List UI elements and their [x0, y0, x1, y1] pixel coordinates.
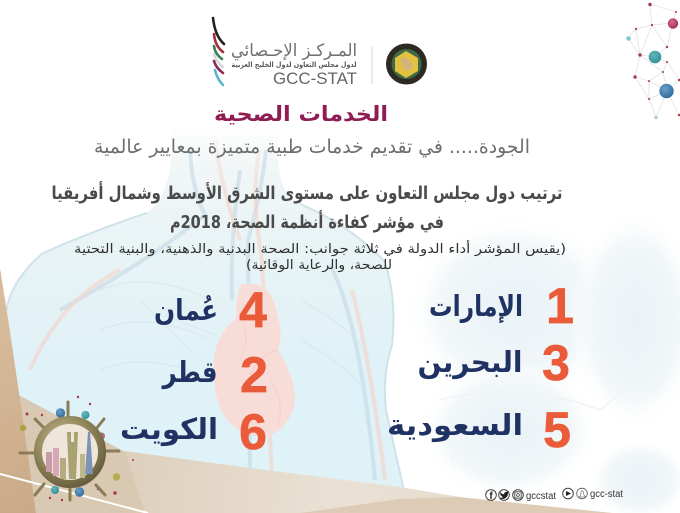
network decoration: top right [626, 3, 680, 119]
country name: قطر [161, 355, 218, 389]
country name: عُمان [154, 293, 218, 327]
title: الخدمات الصحية [214, 102, 388, 126]
heading line 1: ترتيب دول مجلس التعاون على مستوى الشرق الأوسط وشمال أفريقيا [52, 181, 562, 204]
decoration: tan left wedge [0, 385, 145, 513]
logo: ribbon [213, 18, 224, 85]
decoration: tan left strip [0, 268, 36, 513]
icon: ship wheel with city skyline [20, 396, 134, 501]
small teal node [626, 36, 631, 41]
heading line 2: في مؤشر كفاءة أنظمة الصحة، 2018م [170, 210, 444, 233]
rank number 6: 6 [239, 404, 267, 460]
social media footer [486, 488, 623, 502]
logo: GCC emblem [386, 44, 427, 84]
icon: snapchat [577, 488, 587, 499]
decoration: white diagonal line [0, 474, 148, 513]
rank number 5: 5 [543, 402, 571, 458]
ranking: Bahrain [418, 335, 570, 391]
country name: السعودية [387, 408, 523, 442]
rank number 3: 3 [542, 335, 570, 391]
ranking: Qatar [161, 347, 268, 403]
country name: الإمارات [429, 289, 523, 323]
rank number 1: 1 [546, 278, 574, 334]
logo: arabic subtitle: لدول مجلس التعاون لدول الخليج العربية [232, 61, 357, 69]
country name: الكويت [120, 412, 218, 446]
ranking: Saudi Arabia [387, 402, 571, 458]
subtitle: الجودة..... في تقديم خدمات طبية متميزة بمعايير عالمية [94, 136, 530, 158]
decoration: darker bottom band [300, 497, 612, 513]
illustration: heart [214, 284, 295, 436]
country name: البحرين [418, 345, 522, 379]
logo: GCC-STAT wordmark: GCC-STAT [273, 69, 357, 88]
network around the wheel [26, 396, 134, 501]
illustration: human torso [5, 125, 406, 500]
ranking: UAE [429, 278, 574, 334]
icon: facebook: f [489, 491, 493, 502]
blue node [659, 84, 674, 98]
crimson node [668, 18, 678, 29]
rank number 2: 2 [240, 347, 268, 403]
logo: arabic name: المـركـز الإحـصائي [231, 41, 357, 61]
background: faint lung shapes on the right [405, 210, 680, 513]
icon: twitter [499, 490, 509, 500]
pale node [654, 116, 658, 119]
handle: gcc-stat: gcc-stat [590, 489, 623, 500]
teal node [649, 51, 661, 63]
note line 2: للصحة، والرعاية الوقائية) [246, 258, 392, 273]
note line 1: (يقيس المؤشر أداء الدولة في ثلاثة جوانب: الصحة البدنية والذهنية، والبنية التحتية [74, 240, 566, 257]
icon: instagram [513, 490, 523, 500]
rank number 4: 4 [239, 282, 267, 338]
handle: gccstat: gccstat [526, 491, 556, 502]
wheel handles [20, 402, 119, 500]
decoration: tan bottom panel [30, 450, 612, 513]
ranking: Oman [154, 282, 267, 338]
skyline [46, 432, 93, 479]
ranking: Kuwait [120, 404, 267, 460]
icon: youtube [563, 488, 573, 499]
logo: GCC-STAT [213, 18, 427, 88]
